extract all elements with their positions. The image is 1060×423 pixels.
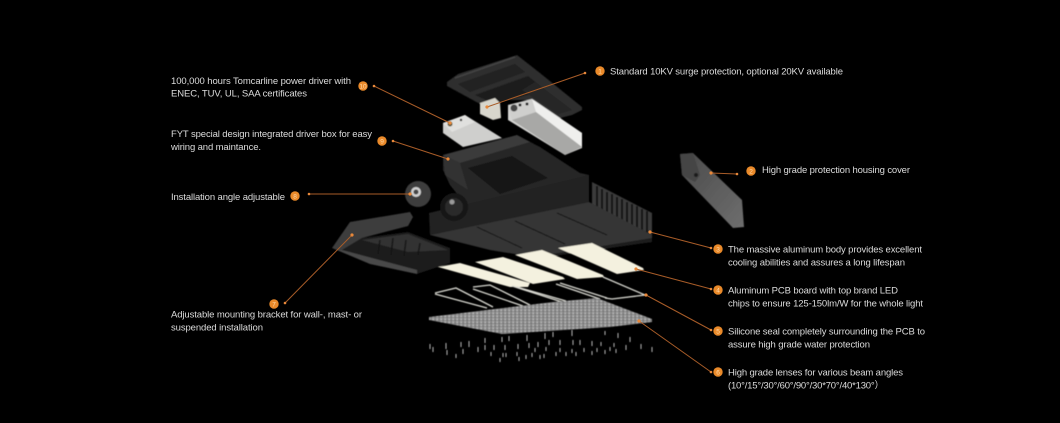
part: surge protector cube [480, 98, 501, 120]
part: lens array [429, 298, 652, 334]
callout 8: installation angle [171, 191, 412, 203]
part: mounting bracket [332, 212, 450, 274]
callout 4: PCB board: chips to ensure 125-150lm/W for the whole light [728, 298, 923, 310]
callout 3: aluminum body: The massive aluminum body provides excellent [728, 244, 922, 256]
part: small white driver [443, 115, 502, 147]
callout 5: silicone seal: Silicone seal completely surrounding the PCB to [728, 326, 925, 338]
callout 10: power driver: 100,000 hours Tomcarline power driver with [171, 76, 351, 87]
callout 1: surge protection [485, 66, 843, 109]
callout 9: driver box: wiring and maintance. [170, 142, 261, 153]
callout 5: silicone seal [644, 293, 925, 350]
part: protection housing cover [680, 153, 744, 228]
callout 5: silicone seal: assure high grade water protection [728, 340, 870, 350]
part: silicone seals [435, 277, 645, 308]
callout 7: mounting bracket: 7 [272, 302, 276, 308]
callout 6: lenses: 6 [716, 370, 720, 376]
part: heat sink fins [592, 182, 652, 235]
callout 9: driver box [170, 129, 450, 161]
callout 10: power driver [171, 76, 452, 125]
callout 9: driver box: FYT special design integrated driver box for easy [171, 129, 372, 140]
callout 10: power driver: 10 [359, 84, 367, 90]
callout 7: mounting bracket: Adjustable mounting bracket for wall-, mast- or [171, 310, 362, 320]
callout 9: driver box: 9 [380, 138, 384, 146]
part: screws [430, 330, 652, 362]
callout 8: installation angle: Installation angle adjustable [171, 192, 285, 203]
callout 8: installation angle: 8 [293, 194, 297, 200]
part: LED PCB boards [438, 243, 644, 287]
callout 6: lenses: High grade lenses for various beam angles [728, 368, 903, 378]
callout 4: PCB board [634, 267, 923, 310]
callout 1: surge protection: 1 [598, 68, 602, 76]
callout 7: mounting bracket [171, 233, 362, 334]
part: angle adjusting disc [405, 181, 431, 207]
part: mounting knob [440, 193, 468, 221]
callout 10: power driver: ENEC, TUV, UL, SAA certificates [171, 88, 307, 100]
callout 3: aluminum body: 3 [716, 246, 720, 254]
part: top back plate [447, 55, 582, 118]
callout 3: aluminum body [648, 230, 922, 268]
illustration: exploded light fixture [332, 55, 744, 362]
callout 2: housing cover: High grade protection housing cover [762, 165, 910, 176]
callout 6: lenses: (10°/15°/30°/60°/90°/30*70°/40*130°） [728, 380, 884, 392]
part: large white power driver [508, 99, 582, 155]
callout 5: silicone seal: 5 [716, 328, 720, 336]
callout 1: surge protection: Standard 10KV surge protection, optional 20KV available [610, 66, 843, 78]
callout 4: PCB board: 4 [716, 288, 720, 294]
callout 3: aluminum body: cooling abilities and assures a long lifespan [728, 258, 905, 268]
callout 2: housing cover: 2 [749, 168, 753, 176]
callout 6: lenses [637, 319, 903, 392]
callout 4: PCB board: Aluminum PCB board with top brand LED [728, 286, 898, 296]
part: aluminum body [429, 175, 652, 258]
callout 7: mounting bracket: suspended installation [171, 322, 263, 334]
part: integrated driver box [443, 135, 589, 210]
